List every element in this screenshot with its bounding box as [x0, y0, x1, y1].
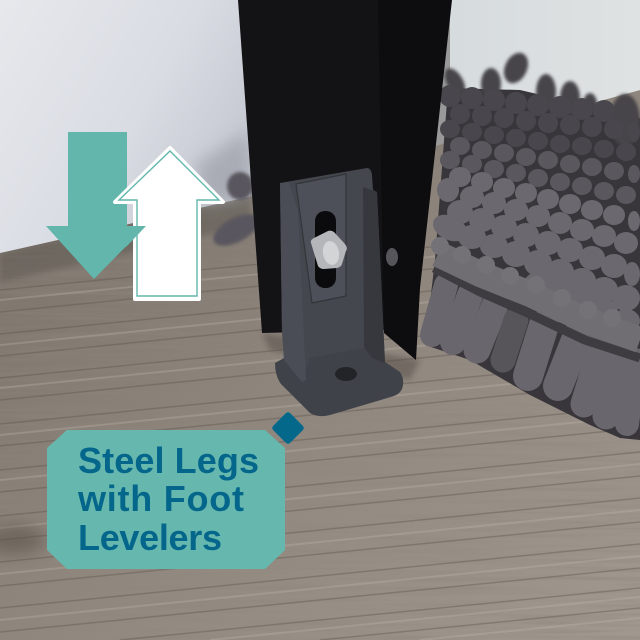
leg right panel — [378, 0, 452, 360]
callout label — [47, 430, 285, 569]
stray mat strands behind leg — [208, 172, 264, 252]
mat back rows — [439, 85, 640, 161]
bracket upright — [280, 168, 385, 382]
callout text: with Foot — [77, 478, 244, 519]
callout box — [47, 430, 285, 569]
callout text: Levelers — [78, 517, 222, 558]
mat front rows — [429, 167, 640, 333]
bracket inner recess — [296, 174, 346, 303]
bracket foot plate — [275, 348, 403, 416]
steel leg — [238, 0, 452, 360]
arrows: down and up — [46, 132, 223, 299]
mat lower strands — [432, 285, 635, 424]
mat dark base — [425, 88, 640, 440]
leg left panel — [238, 0, 385, 333]
fold lumps — [431, 237, 621, 327]
slot — [315, 211, 336, 288]
background: right wall — [450, 0, 640, 120]
foot leveler bracket — [275, 168, 403, 416]
mat back tall tufts — [441, 49, 640, 146]
down arrow — [46, 132, 146, 279]
foot plate hole — [335, 367, 357, 381]
callout marker diamond — [271, 411, 305, 445]
bracket right rib — [363, 187, 385, 363]
callout text: Steel Legs — [78, 440, 259, 481]
mat middle rows — [440, 137, 640, 204]
down arrow head overlap — [115, 226, 146, 247]
leg hole — [386, 248, 398, 266]
background: left wall — [0, 0, 250, 260]
mat rolled fold — [438, 254, 640, 340]
shadow on wall — [195, 130, 250, 205]
chenille mat — [425, 49, 640, 440]
bolt nut — [311, 231, 347, 269]
up arrow — [115, 148, 223, 299]
bolt thread — [321, 240, 341, 266]
bracket left rib — [280, 182, 306, 382]
mat fold shadow — [434, 268, 640, 358]
floor shadow under leg — [262, 333, 420, 380]
